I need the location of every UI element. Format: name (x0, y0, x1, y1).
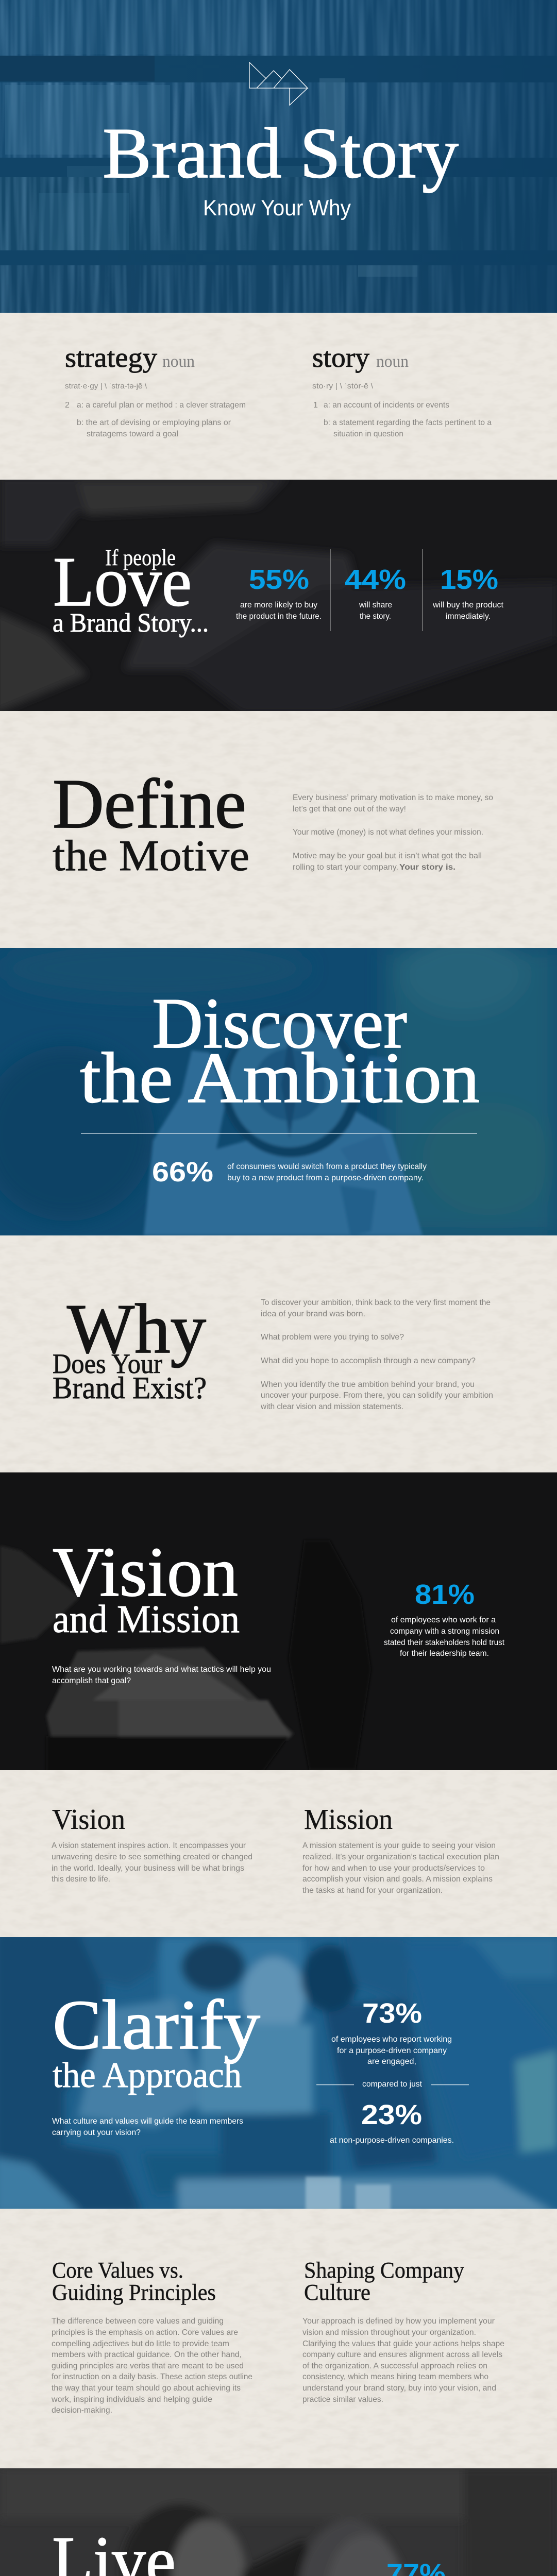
photo: bookshelf (0, 0, 557, 313)
heading: clarify the approach: Clarify (53, 1986, 260, 2064)
photo: tent at night with a silhouette (0, 1540, 371, 1772)
stat: 66%: of consumers would switch from a product they typically (227, 1162, 427, 1171)
column: vision: in the world. Ideally, your business will be what brings (52, 1864, 244, 1873)
column: shaping company culture: company culture and ensures alignment across all levels (302, 2350, 502, 2359)
panel: definitions (0, 313, 557, 480)
definition: strategy: stratagems toward a goal (87, 430, 178, 438)
heading: why does your brand exist: Brand Exist? (53, 1371, 207, 1405)
definition: story: sto·ry | \ ˈstȯr-ē \ (312, 382, 374, 391)
column: shaping company culture: vision and mission throughout your organization. (302, 2328, 476, 2337)
column: vision: this desire to life. (52, 1875, 110, 1884)
panel: define the motive (0, 711, 557, 948)
column: mission: realized. It’s your organization’s tactical execution plan (302, 1853, 499, 1861)
column: shaping company culture: practice similar values. (302, 2395, 383, 2404)
heading: define the motive (53, 765, 249, 880)
column: mission: A mission statement is your guide to seeing your vision (302, 1841, 496, 1850)
column: core values vs guiding principles (51, 2258, 252, 2415)
text: ambition questions: uncover your purpose. From there, you can solidify your ambition (261, 1391, 493, 1400)
stat: 73% vs 23%: compared to just (362, 2080, 423, 2089)
heading: why does your brand exist: Does Your (53, 1348, 162, 1379)
text: vision question: What are you working towards and what tactics will help you (52, 1665, 271, 1674)
column: vision: Vision (52, 1804, 125, 1836)
column: core values vs guiding principles: members with practical guidance. On the other hand, (52, 2350, 242, 2359)
stat: 66% (152, 1157, 427, 1188)
heading: discover the ambition (80, 984, 480, 1118)
stat: 44% (345, 564, 406, 621)
text: ambition questions: What problem were you trying to solve? (261, 1333, 404, 1342)
stat: 55% (236, 564, 322, 621)
text: ambition questions: When you identify the true ambition behind your brand, you (261, 1380, 475, 1389)
heading: why does your brand exist: Why (67, 1290, 206, 1368)
text: culture question (52, 2117, 243, 2137)
panel: vision vs mission definitions (0, 1770, 557, 1937)
heading: define the motive: the Motive (53, 832, 249, 880)
definition: story: noun (376, 352, 409, 371)
stat: 44%: will share (359, 601, 392, 609)
panel: hero (0, 0, 557, 313)
column: shaping company culture: Culture (304, 2280, 370, 2305)
text: ambition questions: What did you hope to accomplish through a new company? (261, 1357, 476, 1365)
text: culture question: carrying out your vision? (52, 2128, 141, 2137)
column: vision: A vision statement inspires action. It encompasses your (52, 1841, 246, 1850)
column: core values vs guiding principles: The difference between core values and guiding (52, 2317, 224, 2326)
column: core values vs guiding principles: principles is the emphasis on action. Core values are (52, 2328, 238, 2337)
heading: why does your brand exist (53, 1290, 207, 1405)
stat: 15%: 15% (440, 564, 498, 595)
column: vision: unwavering desire to see something created or changed (52, 1853, 252, 1861)
panel: love a brand story (0, 477, 557, 714)
heading: vision and mission: Vision (53, 1533, 238, 1611)
column: shaping company culture: consistency, which means hiring team members who (302, 2372, 488, 2381)
panel: live the message (0, 2468, 557, 2576)
photo: woman with megaphone (4, 2472, 459, 2576)
text: ambition questions: To discover your ambition, think back to the very first moment the (261, 1298, 491, 1307)
panel: why does your brand exist (0, 1235, 557, 1472)
column: mission: accomplish your vision and goals. A mission explains (302, 1875, 493, 1884)
column: shaping company culture: Your approach is defined by how you implement your (302, 2317, 495, 2326)
column: core values vs guiding principles: Core Values vs. (52, 2258, 183, 2283)
heading: clarify the approach: the Approach (53, 2056, 242, 2095)
text: motive body: Motive may be your goal but it isn’t what got the ball (293, 852, 482, 860)
heading: discover the ambition: Discover (152, 984, 407, 1063)
heading: if people love a brand story: If people (105, 545, 176, 570)
photo: team around a table (0, 1932, 557, 2213)
panel: discover the ambition (0, 933, 557, 1236)
stat: 81%: 81% (415, 1579, 475, 1610)
column: mission: the tasks at hand for your organization. (302, 1886, 443, 1895)
text: ambition questions: with clear vision and mission statements. (260, 1402, 403, 1411)
column: core values vs guiding principles: decision-making. (52, 2406, 112, 2415)
column: core values vs guiding principles: guiding principles are verbs that are meant to be used (52, 2362, 244, 2370)
stat: 15%: will buy the product (432, 601, 504, 609)
text: ambition questions (260, 1298, 493, 1411)
definition: story: situation in question (333, 430, 403, 438)
subtitle: Know Your Why (203, 196, 351, 221)
heading: define the motive: Define (53, 765, 246, 843)
stat: 81%: company with a strong mission (390, 1627, 499, 1636)
column: core values vs guiding principles: Guiding Principles (52, 2280, 216, 2305)
definition: strategy (65, 342, 246, 438)
text: motive body: Your motive (money) is not what defines your mission. (293, 828, 483, 837)
definition: strategy: b: the art of devising or employing plans or (77, 418, 231, 427)
stat: 81% (384, 1579, 505, 1658)
stat: 55%: the product in the future. (236, 612, 322, 621)
stat: 81%: of employees who work for a (391, 1616, 496, 1624)
stat: 81%: for their leadership team. (400, 1649, 489, 1658)
text: motive body: let’s get that one out of the way! (293, 805, 406, 814)
stat: 73% vs 23%: of employees who report working (331, 2035, 452, 2044)
panel: core values and culture (0, 2209, 557, 2468)
text: motive body: rolling to start your company. (293, 863, 398, 872)
text: motive body: Every business’ primary motivation is to make money, so (293, 793, 493, 802)
text: ambition questions: idea of your brand was born. (261, 1310, 365, 1318)
column: core values vs guiding principles: compelling adjectives but do little to provide team (52, 2340, 229, 2348)
definition: strategy: noun (162, 352, 195, 371)
stat: 73% vs 23%: 73% (362, 1998, 422, 2029)
column: mission: for how and when to use your products/services to (302, 1864, 485, 1873)
heading: clarify the approach (53, 1986, 260, 2095)
text: motive body: Your story is. (399, 863, 455, 872)
text: vision question: accomplish that goal? (52, 1676, 131, 1685)
definition: strategy: strategy (65, 342, 157, 373)
stat: 73% vs 23%: for a purpose-driven company (337, 2046, 447, 2055)
heading: if people love a brand story: Love (53, 543, 192, 621)
definition: story: a: an account of incidents or events (324, 401, 449, 410)
heading: discover the ambition: the Ambition (80, 1038, 480, 1118)
definition: strategy: strat·e·gy | \ ˈstra-tə-jē \ (65, 382, 147, 391)
column: mission: Mission (304, 1804, 393, 1836)
stat: 44%: the story. (360, 612, 391, 621)
column: vision (52, 1804, 252, 1884)
column: shaping company culture: Shaping Company (304, 2258, 464, 2283)
stat: 73% vs 23%: are engaged, (367, 2057, 416, 2066)
definition: story (312, 342, 492, 438)
definition: strategy: 2 (65, 401, 70, 410)
column: core values vs guiding principles: for instruction on a daily basis. These action steps outline (52, 2372, 252, 2381)
column: core values vs guiding principles: the way that your team should go about achieving its (52, 2384, 241, 2393)
panel: vision and mission (0, 1472, 557, 1772)
stat: 15% (432, 564, 504, 621)
title: Brand Story (103, 113, 459, 193)
stat: 55%: are more likely to buy (240, 601, 317, 609)
stat: 73% vs 23%: at non-purpose-driven companies. (330, 2136, 454, 2145)
column: mission (302, 1804, 499, 1895)
stat: 44%: 44% (345, 564, 406, 595)
stat: 66%: 66% (152, 1157, 213, 1188)
photo: hand holding a compass (0, 933, 557, 1236)
column: shaping company culture: understand your brand story, buy into your vision, and (302, 2384, 496, 2393)
definition: story: story (312, 342, 369, 373)
column: shaping company culture: of the organization. A successful approach relies on (302, 2362, 487, 2370)
panel: clarify the approach (0, 1932, 557, 2213)
stat: 66%: buy to a new product from a purpose-driven company. (227, 1174, 424, 1182)
text: culture question: What culture and values will guide the team members (52, 2117, 243, 2126)
stat: 73% vs 23% (316, 1998, 469, 2145)
text: motive body (293, 793, 493, 872)
stat: 73% vs 23%: 23% (361, 2099, 422, 2130)
heading: if people love a brand story: a Brand Story... (53, 608, 209, 638)
column: shaping company culture: Clarifying the values that guide your actions helps shape (302, 2340, 504, 2348)
definition: strategy: a: a careful plan or method : a clever stratagem (77, 401, 246, 410)
icon: origami fish logo (249, 62, 308, 105)
text: vision question (52, 1665, 271, 1685)
stat: 81%: stated their stakeholders hold trust (384, 1638, 505, 1647)
heading: vision and mission: and Mission (53, 1598, 240, 1641)
definition: story: 1 (313, 401, 318, 410)
column: shaping company culture (302, 2258, 504, 2404)
photo: hands holding a book (0, 477, 557, 714)
definition: story: b: a statement regarding the facts pertinent to a (324, 418, 492, 427)
stat: 15%: immediately. (446, 612, 491, 621)
column: core values vs guiding principles: work, inspiring individuals and helping guide (51, 2395, 212, 2404)
stat: 55%: 55% (249, 564, 309, 595)
